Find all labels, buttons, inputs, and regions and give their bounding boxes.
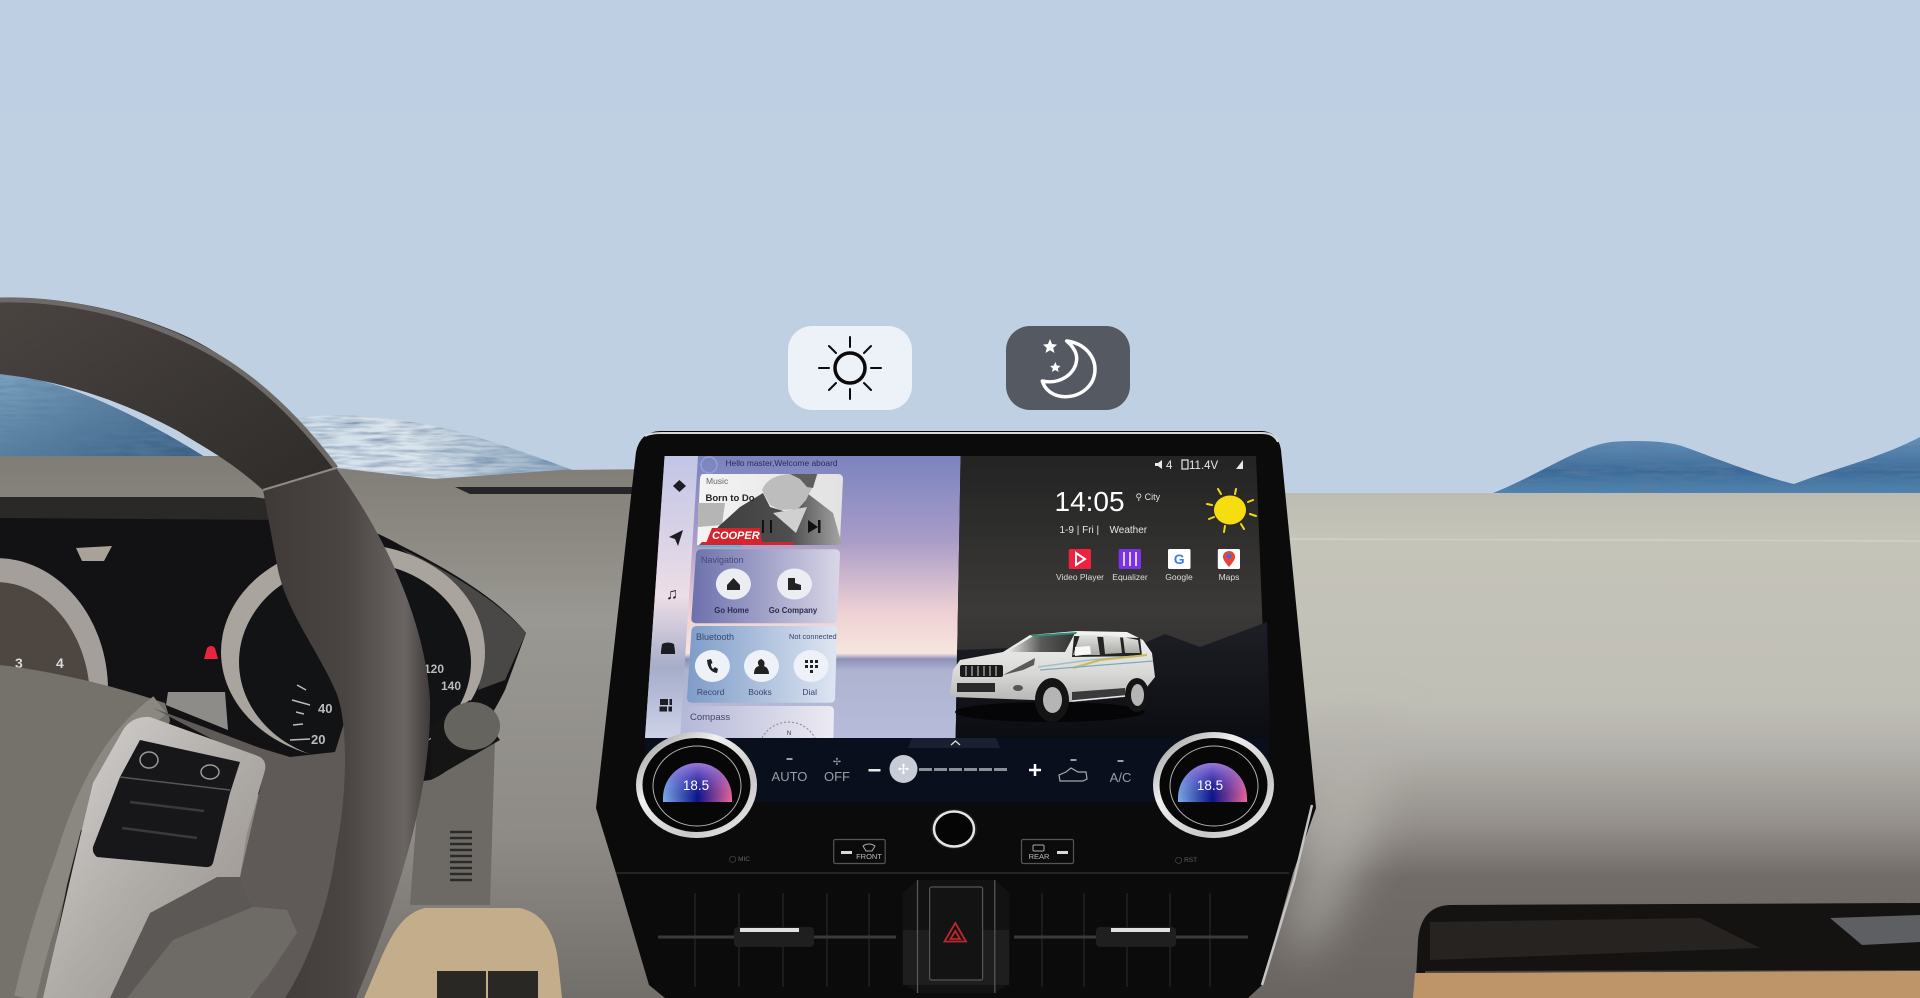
control stalk bbox=[431, 700, 500, 780]
right temperature knob: 18.5 bbox=[1197, 778, 1223, 793]
vent knob: right bbox=[1096, 927, 1176, 947]
icon: weather sun bbox=[1207, 489, 1256, 532]
card: bluetooth: Bluetooth bbox=[696, 632, 734, 642]
card: music: Born to Do bbox=[706, 493, 755, 504]
card: bluetooth: Record bbox=[697, 687, 725, 697]
wheels bbox=[1035, 678, 1069, 722]
date and weather: 1-9 | Fri | bbox=[1060, 525, 1099, 536]
album photo: man bbox=[698, 474, 842, 545]
side windows bbox=[1072, 636, 1142, 657]
status bar: 4 bbox=[1166, 460, 1173, 472]
front defrost button bbox=[834, 840, 885, 864]
icon: windshield car bbox=[1059, 759, 1087, 781]
icon: sun bbox=[819, 337, 881, 399]
icon: hazard triangle bbox=[944, 923, 966, 942]
silver spoke trim bbox=[43, 717, 265, 998]
rail icons bbox=[660, 480, 686, 712]
gauge: right speedometer bbox=[221, 544, 485, 762]
card: bluetooth bbox=[687, 626, 837, 703]
status bar: 11.4V bbox=[1189, 460, 1219, 472]
front defrost button: FRONT bbox=[856, 852, 882, 861]
bumper bbox=[957, 683, 995, 692]
mode button: night bbox=[1006, 326, 1130, 410]
stripes bbox=[1038, 655, 1147, 667]
vent knob: left bbox=[734, 927, 814, 947]
wheel buttons bbox=[93, 740, 240, 867]
grille bbox=[960, 665, 1003, 677]
plate bbox=[166, 692, 228, 730]
gauge: right speedometer: 40 bbox=[318, 701, 332, 716]
rear defrost button: REAR bbox=[1029, 852, 1050, 861]
auto label: AUTO bbox=[772, 769, 807, 784]
bezel bbox=[596, 431, 1316, 998]
auto label bbox=[772, 758, 807, 784]
app: equalizer bbox=[1112, 549, 1148, 582]
mountains: left bbox=[0, 374, 573, 490]
mode button: day bbox=[788, 326, 912, 410]
hills silhouette bbox=[956, 622, 1270, 738]
card: bluetooth: Dial bbox=[802, 687, 817, 697]
a/c label: A/C bbox=[1110, 770, 1131, 785]
fan slider: ✢ bbox=[898, 761, 910, 777]
steering wheel bbox=[0, 298, 430, 998]
album logo bbox=[698, 528, 794, 547]
home button bbox=[931, 809, 977, 849]
mountains: right bbox=[1488, 437, 1920, 505]
off label: ✢ bbox=[833, 757, 841, 768]
off label: OFF bbox=[824, 769, 850, 784]
climate control strip bbox=[645, 738, 1269, 802]
app: maps: Maps bbox=[1219, 572, 1239, 582]
card: navigation: Go Home bbox=[714, 606, 750, 615]
card: compass bbox=[683, 706, 834, 738]
app: google: Google bbox=[1165, 572, 1193, 582]
date and weather: Weather bbox=[1110, 525, 1148, 536]
left temperature knob: 18.5 bbox=[683, 778, 709, 793]
mic label: ◯ MIC bbox=[729, 855, 750, 863]
sill bbox=[1072, 688, 1125, 702]
off label bbox=[824, 757, 850, 784]
dashboard: right side bbox=[1200, 493, 1920, 998]
card: navigation: Go Company bbox=[769, 606, 818, 615]
car body bbox=[950, 631, 1155, 702]
card: bluetooth: Books bbox=[748, 687, 772, 697]
speaker grille bbox=[450, 832, 472, 880]
app: equalizer: Equalizer bbox=[1112, 572, 1148, 582]
date and weather bbox=[1060, 525, 1148, 536]
rear defrost button bbox=[1022, 840, 1074, 864]
gauge: left tachometer bbox=[0, 558, 108, 822]
air vents bbox=[658, 893, 1248, 987]
card: compass: Compass bbox=[690, 712, 730, 723]
side rail bbox=[645, 456, 698, 738]
dashboard: left side bbox=[0, 456, 760, 998]
head unit bbox=[596, 431, 1316, 998]
app tiles bbox=[1056, 549, 1240, 582]
gauge: left tachometer: 4 bbox=[56, 655, 64, 671]
clock: 14:05 bbox=[1054, 486, 1125, 517]
a/c label bbox=[1110, 760, 1131, 785]
card: navigation bbox=[691, 549, 840, 623]
rail icons: ♫ bbox=[666, 586, 678, 603]
spoke leather bbox=[153, 708, 355, 998]
app: google bbox=[1165, 549, 1193, 582]
city label: ⚲ City bbox=[1136, 492, 1161, 502]
lower spoke strip bbox=[110, 877, 253, 998]
album logo: COOPER bbox=[712, 530, 760, 542]
gauge: right speedometer: 20 bbox=[311, 732, 325, 747]
warning light bbox=[204, 646, 218, 659]
card: navigation: Navigation bbox=[701, 555, 744, 565]
car: white suv bbox=[950, 631, 1155, 722]
greeting bbox=[701, 457, 838, 473]
greeting: Hello master,Welcome aboard bbox=[726, 458, 838, 468]
gauge: right speedometer: 140 bbox=[441, 679, 461, 693]
fan slider bbox=[868, 755, 1041, 783]
app: google: G bbox=[1174, 551, 1185, 567]
app: video player: Video Player bbox=[1056, 572, 1104, 582]
card: bluetooth: Not connected bbox=[789, 632, 837, 641]
wheel pad bbox=[0, 665, 170, 998]
right temperature knob bbox=[1153, 732, 1274, 838]
app: video player bbox=[1056, 549, 1104, 582]
lower spoke opening bbox=[127, 907, 297, 998]
card: compass: N bbox=[787, 731, 791, 737]
windshield bbox=[1007, 633, 1075, 652]
playback controls bbox=[762, 520, 820, 533]
gauge: left tachometer: 3 bbox=[15, 655, 23, 671]
card: music: Music bbox=[706, 476, 729, 486]
instrument cluster bbox=[0, 497, 526, 822]
left temperature knob bbox=[636, 732, 757, 838]
rst label: ◯ RST bbox=[1175, 856, 1197, 864]
screen: day mode bbox=[645, 456, 961, 738]
card: music bbox=[697, 474, 843, 547]
screen: night mode bbox=[950, 456, 1270, 738]
beige lower panel bbox=[364, 908, 562, 998]
wheel rim upper section bbox=[0, 298, 336, 490]
icon: moon and stars bbox=[1042, 339, 1095, 397]
headlight bbox=[1003, 658, 1035, 675]
app: maps bbox=[1218, 549, 1240, 582]
status bar bbox=[1155, 460, 1243, 472]
gauge: right speedometer: 120 bbox=[424, 662, 444, 676]
hazard button panel bbox=[903, 880, 1010, 993]
wheel rim lower section bbox=[263, 468, 430, 998]
glove box trim bbox=[1413, 903, 1920, 998]
